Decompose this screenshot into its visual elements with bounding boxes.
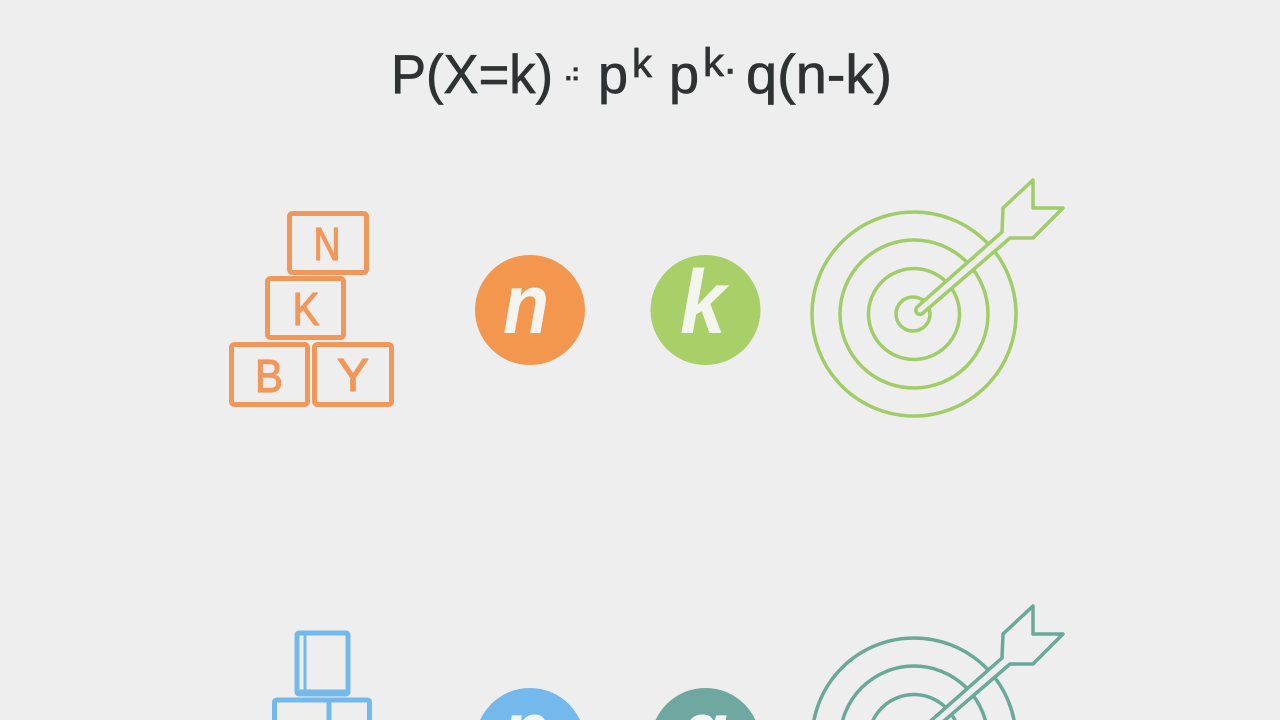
title: formula: p — [669, 45, 699, 105]
title: formula: · — [726, 55, 736, 88]
icon: teal target with arrow — [812, 606, 1063, 720]
badge: teal q — [650, 684, 760, 720]
icon: orange letter blocks: B — [255, 350, 283, 402]
title: formula — [391, 41, 892, 105]
badge: blue n — [475, 684, 585, 720]
badge: green k: k — [680, 253, 730, 353]
title: formula: .: — [565, 59, 580, 86]
badge: orange n: n — [503, 257, 549, 351]
icon: green target with arrow — [812, 180, 1063, 416]
title: formula: k — [703, 41, 725, 85]
title: formula: k — [632, 42, 653, 86]
title: formula: P(X=k) — [391, 43, 553, 105]
icon: orange letter blocks: Y — [337, 349, 369, 401]
badge: orange n — [475, 255, 585, 365]
icon: blue blocks — [274, 633, 370, 720]
badge: green k — [650, 253, 760, 365]
title: formula: p — [598, 45, 628, 105]
icon: orange letter blocks: K — [292, 283, 320, 335]
icon: orange letter blocks — [232, 214, 392, 404]
icon: orange letter blocks: N — [314, 218, 340, 270]
title: formula: q(n-k) — [746, 43, 892, 105]
